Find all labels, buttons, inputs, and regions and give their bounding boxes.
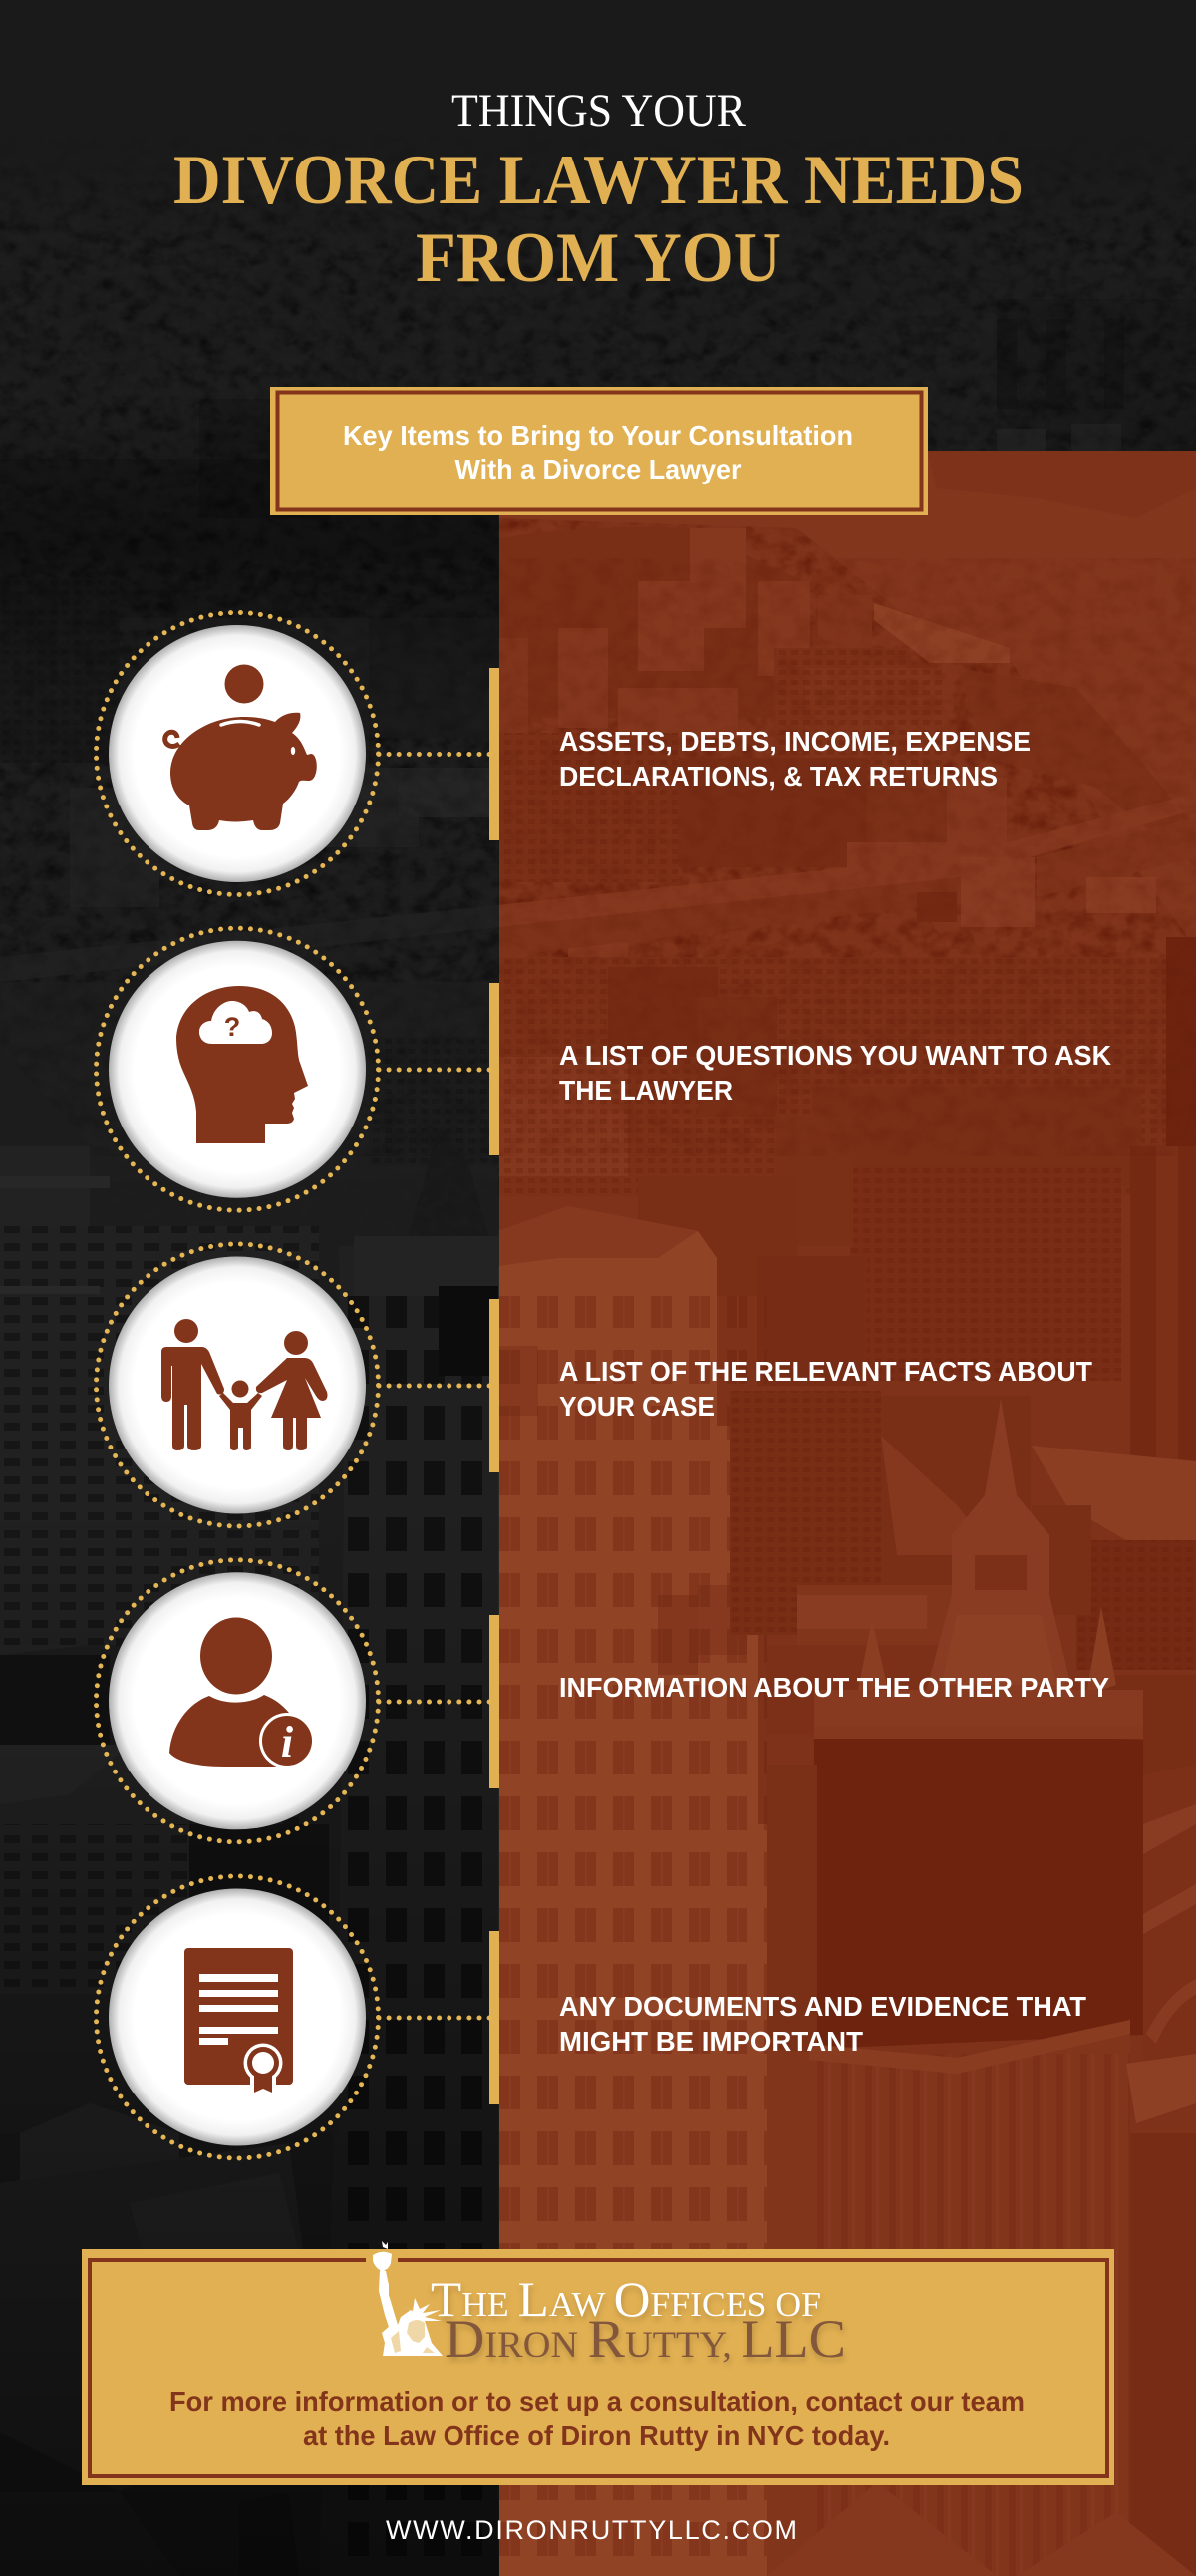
footer call to action: at the Law Office of Diron Rutty in NYC today.: [303, 2420, 890, 2451]
white disc: [109, 1256, 366, 1513]
item 5: documents: [96, 1876, 1086, 2158]
subtitle box: key items: Key Items to Bring to Your Consultation: [343, 420, 853, 451]
icon: person with info badge: [169, 1617, 315, 1769]
icon: certificate with seal: [184, 1948, 293, 2093]
item text: YOUR CASE: [559, 1391, 715, 1422]
footer call to action: For more information or to set up a consultation, contact our team: [169, 2386, 1025, 2416]
item text: INFORMATION ABOUT THE OTHER PARTY: [559, 1672, 1109, 1703]
dotted ring: [96, 1876, 379, 2158]
footer panel: [82, 2241, 1114, 2485]
icon: family: [161, 1319, 327, 1450]
item text: DECLARATIONS, & TAX RETURNS: [559, 761, 998, 792]
connector and gold bar: [379, 1931, 499, 2104]
item text: [559, 1991, 1086, 2057]
icon: head with question cloud: [176, 986, 308, 1143]
connector and gold bar: [379, 1299, 499, 1472]
white disc: [109, 625, 366, 882]
icon: head with question cloud: ?: [224, 1012, 240, 1042]
dotted ring: [96, 1244, 379, 1526]
logo: statue of liberty: [373, 2241, 443, 2356]
background: red-tinted city photo, right half: [499, 451, 1196, 2576]
white disc: [109, 1888, 366, 2145]
connector and gold bar: [379, 983, 499, 1155]
title line: divorce lawyer needs: DIVORCE LAWYER NEEDS: [173, 142, 1024, 219]
white disc: [109, 941, 366, 1198]
item 1: assets: [96, 612, 1031, 895]
icon: person with info badge: i: [281, 1718, 294, 1767]
footer call to action: [169, 2386, 1025, 2451]
title line: things your: THINGS YOUR: [451, 85, 747, 137]
website url: WWW.DIRONRUTTYLLC.COM: [386, 2515, 797, 2545]
subtitle box: key items: [270, 387, 928, 515]
item 2: questions: [96, 928, 1111, 1210]
connector and gold bar: [379, 668, 499, 840]
item text: ASSETS, DEBTS, INCOME, EXPENSE: [559, 726, 1031, 757]
dotted ring: [96, 1560, 379, 1842]
logo: [373, 2241, 846, 2369]
item text: A LIST OF THE RELEVANT FACTS ABOUT: [559, 1356, 1092, 1387]
item text: [559, 726, 1031, 792]
logo: firm name line 1: THE LAW OFFICES OF: [431, 2271, 821, 2327]
item text: [559, 1356, 1092, 1422]
item text: ANY DOCUMENTS AND EVIDENCE THAT: [559, 1991, 1086, 2022]
title line: from you: FROM YOU: [416, 219, 781, 297]
subtitle box: key items: With a Divorce Lawyer: [454, 454, 742, 484]
logo: firm name line 2: DIRON RUTTY, LLC: [445, 2309, 846, 2369]
item 3: relevant facts: [96, 1244, 1092, 1526]
dotted ring: [96, 928, 379, 1210]
dotted ring: [96, 612, 379, 895]
item text: THE LAWYER: [559, 1075, 733, 1106]
connector and gold bar: [379, 1615, 499, 1788]
white disc: [109, 1572, 366, 1829]
title: [173, 85, 1024, 297]
item text: MIGHT BE IMPORTANT: [559, 2026, 863, 2057]
item text: [559, 1040, 1111, 1106]
icon: piggy bank: [165, 664, 317, 830]
item 4: other party: [96, 1560, 1109, 1842]
item text: A LIST OF QUESTIONS YOU WANT TO ASK: [559, 1040, 1111, 1071]
